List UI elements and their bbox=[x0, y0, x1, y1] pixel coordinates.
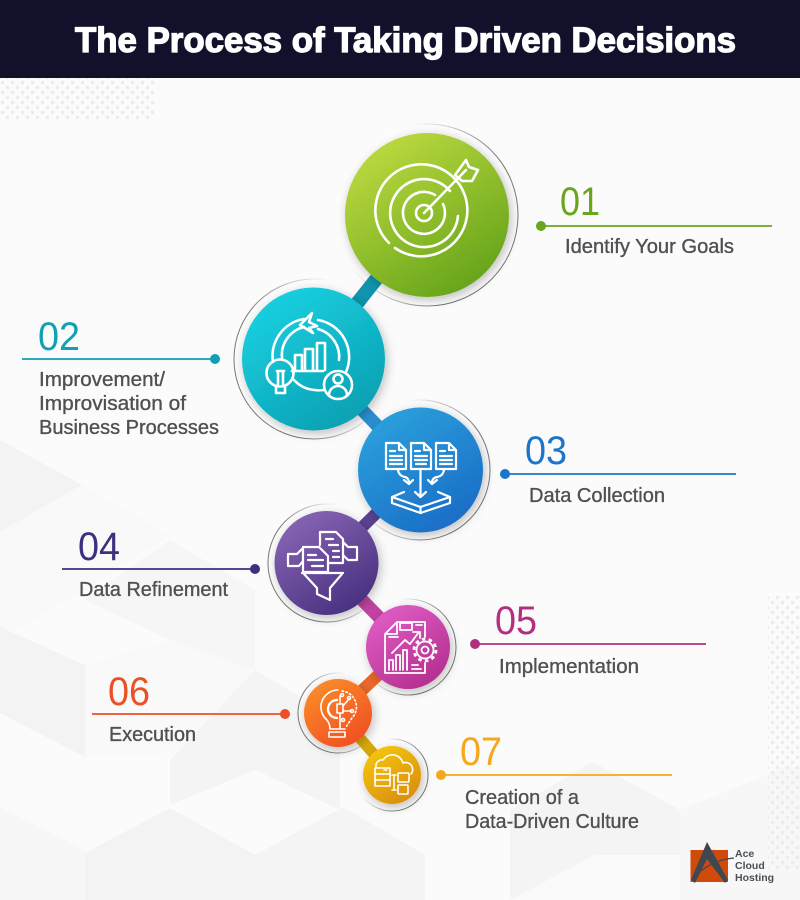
label 04: 04 bbox=[78, 525, 120, 569]
label 03: Data Collection bbox=[529, 485, 665, 507]
rings behind circles bbox=[234, 124, 518, 811]
label 05: Implementation bbox=[499, 656, 639, 678]
title bar bbox=[0, 0, 800, 78]
label 01: Identify Your Goals bbox=[565, 236, 734, 258]
logo: Ace Cloud Hosting: Ace bbox=[735, 848, 754, 860]
label 06 bbox=[92, 670, 290, 746]
label 05: 05 bbox=[495, 599, 537, 643]
logo: Ace Cloud Hosting bbox=[690, 842, 774, 884]
icon: cycle, chart, bulb, person bbox=[266, 313, 352, 399]
logo: Ace Cloud Hosting: Cloud bbox=[735, 860, 765, 872]
label 02: Improvisation of bbox=[39, 393, 186, 415]
icon: report with gear bbox=[385, 622, 436, 673]
label 02 bbox=[22, 315, 220, 439]
step 2 circle and improvement icon bbox=[242, 288, 385, 430]
step 4 circle and data refinement icon bbox=[274, 511, 378, 615]
dot pattern: top left bbox=[0, 78, 156, 119]
label 07: Creation of a bbox=[465, 787, 580, 809]
label 07: Data-Driven Culture bbox=[465, 811, 639, 833]
label 07: 07 bbox=[460, 730, 502, 774]
label 01 bbox=[536, 180, 772, 258]
logo: Ace Cloud Hosting: Hosting bbox=[735, 872, 774, 884]
step 3 circle and data collection icon bbox=[358, 408, 483, 532]
step 6 circle and execution icon bbox=[304, 679, 372, 747]
step 1 circle and target icon bbox=[345, 133, 509, 297]
icon: target bbox=[375, 160, 478, 256]
label 06: Execution bbox=[109, 724, 196, 746]
step 7 circle and culture icon bbox=[363, 746, 421, 804]
step 5 circle and implementation icon bbox=[366, 605, 450, 689]
label 07 bbox=[436, 730, 672, 833]
icon: documents into box bbox=[386, 443, 456, 513]
label 02: Improvement/ bbox=[39, 369, 165, 391]
label 01: 01 bbox=[560, 180, 600, 224]
connectors between circles bbox=[313, 215, 427, 775]
label 02: 02 bbox=[38, 315, 80, 359]
label 05 bbox=[470, 599, 706, 678]
label 02: Business Processes bbox=[39, 417, 219, 439]
icon: bulb with gear bbox=[321, 690, 356, 737]
label 04: Data Refinement bbox=[79, 579, 228, 601]
label 03 bbox=[500, 429, 736, 507]
title: The Process of Taking Driven Decisions bbox=[75, 21, 736, 60]
label 06: 06 bbox=[108, 670, 150, 714]
label 03: 03 bbox=[525, 429, 567, 473]
dot pattern: right bbox=[768, 595, 800, 870]
label 04 bbox=[62, 525, 260, 601]
icon: funnel and documents bbox=[288, 532, 357, 600]
icon: cloud, server and folders bbox=[375, 755, 413, 794]
